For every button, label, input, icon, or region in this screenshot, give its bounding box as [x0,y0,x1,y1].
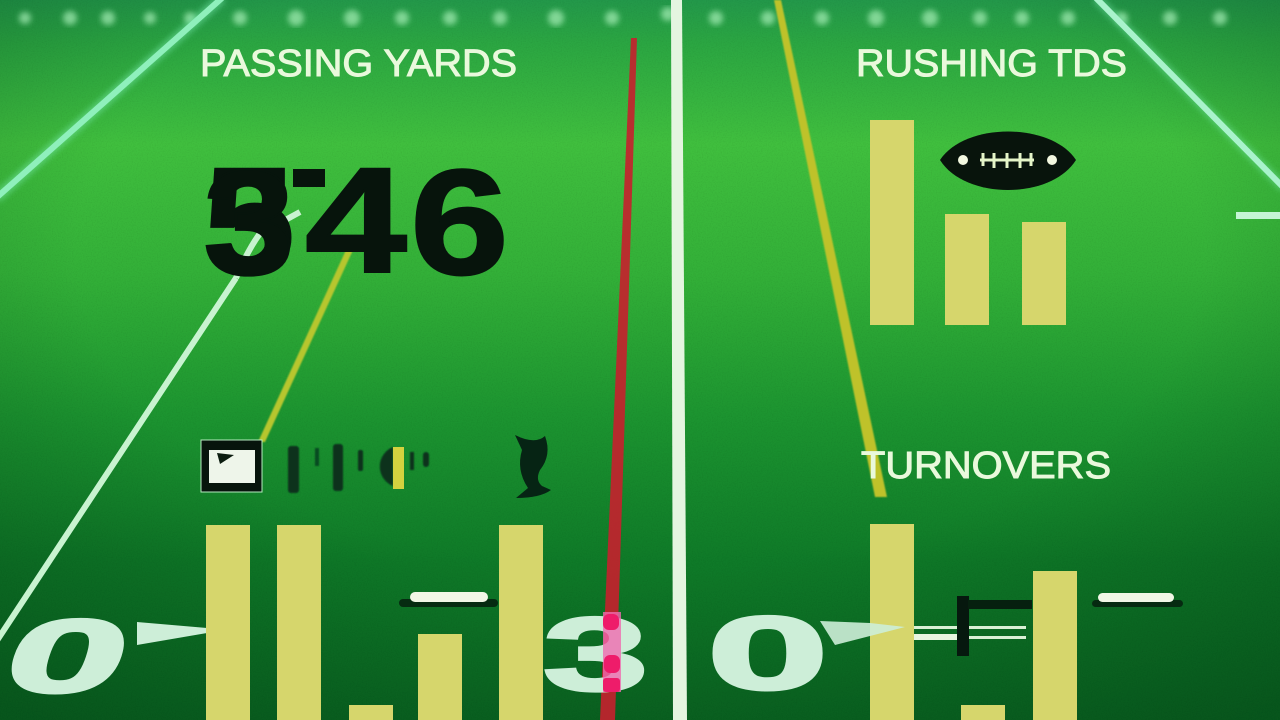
icon: framed box [201,440,262,492]
big number: passing yards: 6 [410,138,509,306]
right sideline and tick [1096,0,1280,219]
heading: rushing tds: RUSHING TDS [856,43,1127,85]
bar chart: bottom right [870,524,1077,720]
left sideline upper [0,0,222,198]
bar chart: bottom left [206,525,543,720]
icon: yellow marker [393,447,404,489]
yellow line left [258,250,353,442]
field number: center three: 3 [543,597,648,712]
t-shaped marker: bottom right [914,596,1032,656]
dash marker: bottom left [399,592,498,607]
big number: passing yards [203,136,509,306]
heading: passing yards: PASSING YARDS [200,43,517,85]
big number: passing yards: 4 [305,136,407,304]
big number: passing yards: 5 [203,136,295,304]
field arrow: right [820,621,905,645]
distant crowd lights row [19,7,1227,26]
icon: dark blob [515,435,551,498]
pink overlap of red line [603,612,621,692]
icon: football [940,132,1076,190]
red line [600,38,637,720]
heading: turnovers: TURNOVERS [861,445,1111,487]
dash marker: bottom right [1092,593,1183,607]
center white line [671,0,687,720]
icon row: passing stats glyphs [201,435,551,498]
bar chart: rushing tds [870,120,1066,325]
icon: dark glyph fragments [288,444,429,493]
field number: right zero: 0 [707,595,828,711]
big number: passing yards: 3 [203,138,295,306]
field arrow: left [137,622,207,645]
yellow line right [774,0,887,497]
left sideline lower with hook [0,212,300,642]
